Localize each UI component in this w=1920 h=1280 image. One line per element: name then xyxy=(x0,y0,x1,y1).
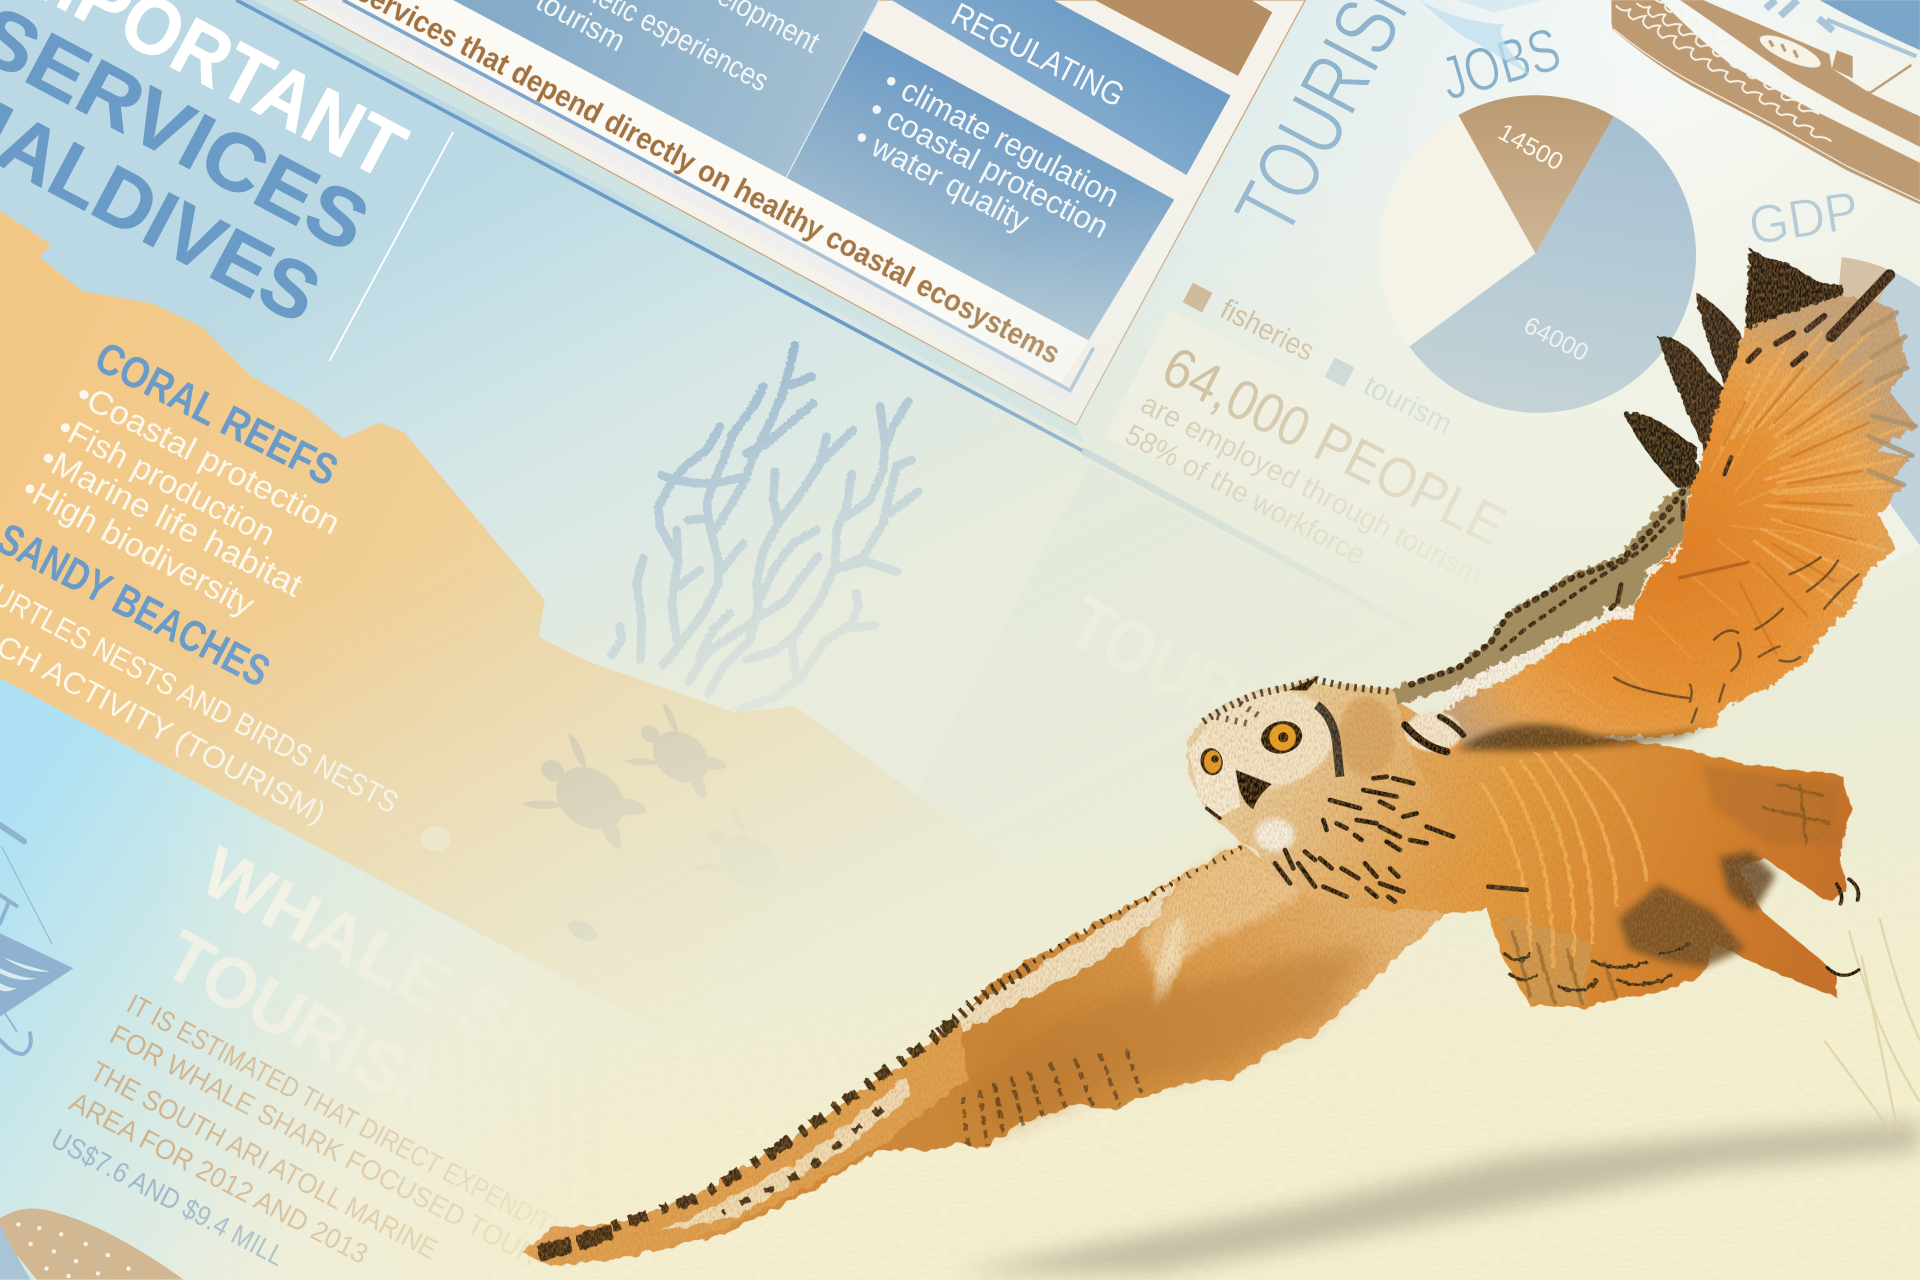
gdp heading: GDP xyxy=(1745,180,1863,257)
boat sketch left xyxy=(0,825,73,1054)
sand band xyxy=(0,210,942,991)
head base xyxy=(1187,676,1470,912)
chest flecks xyxy=(1207,777,1527,902)
lower wing xyxy=(523,844,1444,1266)
whale shark heading: WHALE SHARK xyxy=(188,832,712,1161)
fluffy thigh feathers xyxy=(1482,753,1647,1004)
grey band xyxy=(306,0,343,1)
wing feather shadows xyxy=(1723,361,1869,653)
neck tan xyxy=(1338,697,1395,777)
coral xyxy=(612,345,918,710)
stat card xyxy=(1103,310,1542,600)
wing fan xyxy=(1439,295,1917,746)
ear tuft xyxy=(1288,676,1319,691)
pale blue cabin strokes xyxy=(1766,0,1916,56)
turtles and shells xyxy=(421,702,727,940)
left column box xyxy=(453,0,879,178)
whale splash xyxy=(1419,0,1543,76)
speckled leading edge xyxy=(1366,485,1690,719)
chart legend: fisheries xyxy=(1215,293,1320,368)
cheek white xyxy=(1255,818,1295,852)
blue stripe xyxy=(343,0,1093,391)
mast line xyxy=(1847,65,1911,107)
coral reefs heading: CORAL REEFS xyxy=(87,333,345,496)
lower left whale shark section xyxy=(0,678,857,1280)
deck window xyxy=(1756,29,1824,74)
shoulder patch xyxy=(1405,712,1463,752)
boat illustration xyxy=(1611,0,1920,204)
sand shadow streaks xyxy=(955,1120,1920,1273)
face disc xyxy=(1190,679,1344,801)
dark feather marks xyxy=(1724,275,1890,474)
owl head and chest xyxy=(1187,676,1527,912)
jobs heading: JOBS xyxy=(1433,14,1568,113)
wing leading edge white xyxy=(918,882,1176,1053)
wing tip cream xyxy=(661,1078,912,1231)
jobs pie chart: 64000 xyxy=(1519,312,1593,367)
regulating content box xyxy=(786,31,1174,340)
coral reefs list: •High biodiversity xyxy=(16,470,260,624)
chart legend: tourism xyxy=(1358,369,1457,441)
body xyxy=(1248,698,1851,1008)
regulating list: • water quality xyxy=(849,119,1035,239)
coral reefs list: •Marine life habitat xyxy=(34,440,308,605)
hull rope band xyxy=(1611,0,1920,204)
panel: ecosystem services table xyxy=(236,0,1346,594)
panel outer stripes xyxy=(236,0,1346,594)
facial disc stripe xyxy=(1317,705,1340,777)
wing tip body xyxy=(527,1020,967,1266)
jobs pie chart: 14500 xyxy=(1493,119,1568,176)
owl illustration xyxy=(523,249,1917,1266)
upper wing xyxy=(1366,249,1917,746)
stat card: 58% of the workforce xyxy=(1120,418,1371,572)
regulating header box xyxy=(891,0,1231,175)
regulating heading: REGULATING xyxy=(945,0,1130,115)
wing texture strokes xyxy=(1559,409,1814,712)
jobs pie chart xyxy=(1379,95,1696,413)
stat text: are employed through tourism xyxy=(1136,387,1487,592)
wing pale shoulder xyxy=(1139,844,1310,980)
sea gradient xyxy=(0,678,857,1280)
body shadow patches xyxy=(1457,722,1840,967)
dry shrub xyxy=(1824,918,1920,1133)
sandy beaches heading: SANDY BEACHES xyxy=(0,514,278,697)
wing feather strokes xyxy=(1722,319,1907,605)
stat number: 64,000 PEOPLE xyxy=(1153,334,1515,558)
deck xyxy=(1680,0,1920,147)
whale shark illustration xyxy=(0,1209,184,1280)
black feather tips xyxy=(1623,249,1843,495)
faded panel heading: TOURISM xyxy=(1055,580,1354,791)
feather edge scallops xyxy=(1614,557,1859,722)
left eye xyxy=(1198,746,1225,777)
rope texture xyxy=(1614,0,1920,201)
faded infographic xyxy=(0,0,1559,991)
talons xyxy=(1827,879,1859,975)
grey wing tips xyxy=(1862,313,1915,485)
divider line xyxy=(329,132,453,361)
brown header box xyxy=(1095,0,1272,76)
separator xyxy=(786,0,879,178)
chart: gdp pie xyxy=(1668,257,1920,576)
head speckles xyxy=(1203,680,1393,722)
lower body pale feathers xyxy=(1499,912,1592,1004)
tail bars xyxy=(1504,784,1831,991)
coral reefs list: •Fish production xyxy=(51,409,281,553)
beak xyxy=(1236,770,1272,809)
title xyxy=(0,0,419,341)
whale shark paragraph: FOR WHALE SHARK FOCUSED TOUR xyxy=(105,1019,543,1271)
panel base xyxy=(294,0,1305,425)
regulating list: • coastal protection xyxy=(864,91,1115,245)
cabin rear xyxy=(1832,50,1853,78)
water xyxy=(1820,0,1920,50)
coral reefs list: •Coastal protection xyxy=(70,376,346,542)
beach heading and lists xyxy=(0,333,404,831)
left face xyxy=(1188,733,1240,817)
regulating list: • climate regulation xyxy=(878,62,1125,214)
wing mid shade xyxy=(967,949,1371,1133)
right eye xyxy=(1258,717,1305,757)
wing pale patch xyxy=(1148,914,1191,1009)
whale shark paragraph: AREA FOR 2012 AND 2013 xyxy=(65,1086,373,1270)
coral reefs list xyxy=(25,390,337,618)
faint lower panel xyxy=(857,463,1920,1273)
wing bars xyxy=(539,847,1242,1254)
whale shark paragraph: THE SOUTH ARI ATOLL MARINE xyxy=(85,1055,443,1265)
chart legend xyxy=(1183,283,1457,441)
text band xyxy=(347,0,1089,383)
tourism sub heading: TOURISM xyxy=(151,916,470,1141)
